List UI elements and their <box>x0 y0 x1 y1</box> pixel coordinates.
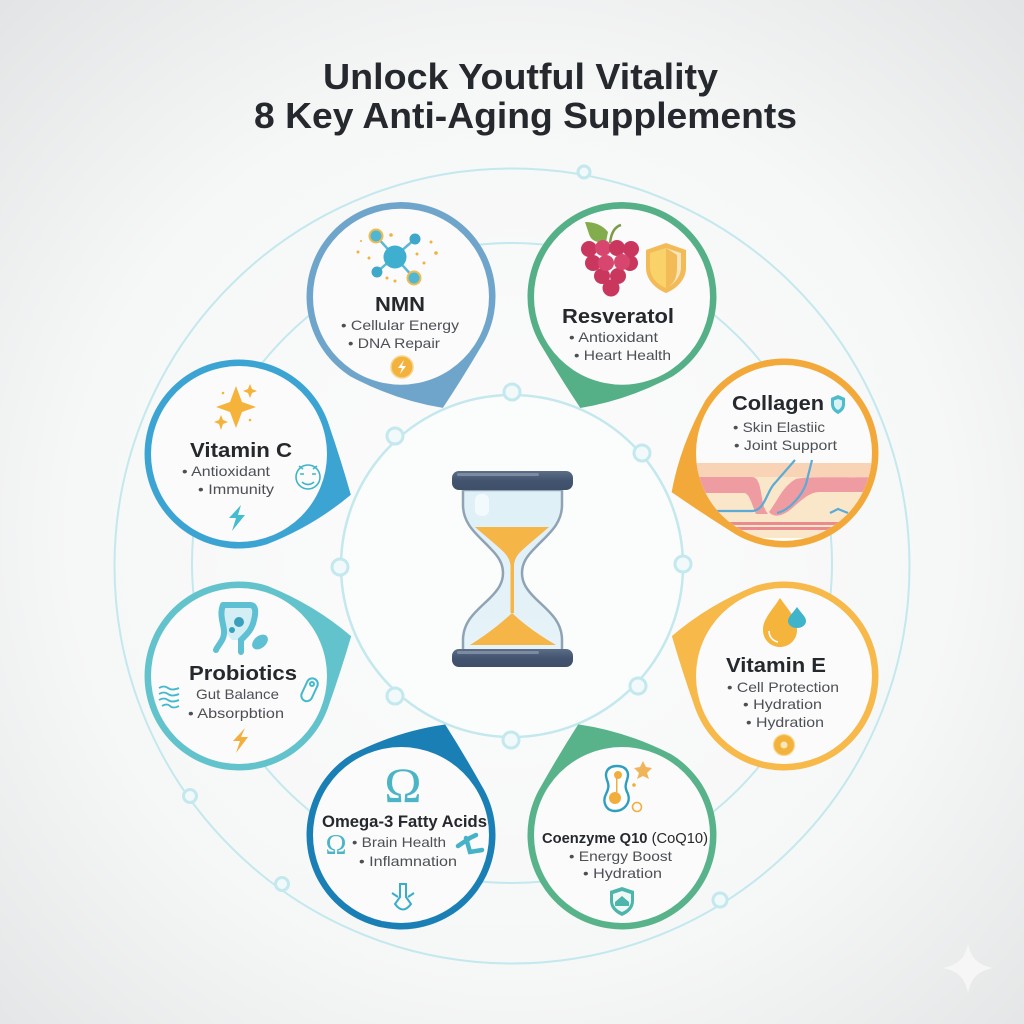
icon: sparkles <box>214 384 257 430</box>
heading: Coenzyme Q10 (CoQ10) <box>542 831 708 847</box>
benefits: • Skin Elastiic <box>733 419 825 435</box>
icon: omega large: Ω <box>384 757 422 813</box>
icon: oil drops <box>763 598 806 647</box>
panel: Collagen <box>672 358 878 548</box>
panel: Probiotics <box>118 547 383 797</box>
heading: Vitamin C <box>190 440 292 462</box>
benefits <box>569 329 671 363</box>
heading: Resveratol <box>562 306 674 328</box>
concentric orbit rings <box>114 166 910 964</box>
icon: shield <box>646 243 686 293</box>
benefits: • DNA Repair <box>348 335 440 351</box>
benefits: • Energy Boost <box>569 848 672 864</box>
icon: face <box>296 465 320 489</box>
ring <box>278 689 533 958</box>
benefits <box>182 463 274 497</box>
icon: waves <box>159 686 179 708</box>
icon: star <box>634 761 652 779</box>
benefits: • Immunity <box>198 481 274 497</box>
benefits: • Inflamnation <box>359 853 457 869</box>
icon: flask <box>392 884 414 910</box>
ring <box>118 547 383 797</box>
icon: hourglass <box>452 471 573 667</box>
icon: lightning <box>229 505 245 531</box>
icon: grapes <box>581 222 639 296</box>
benefits <box>341 317 459 351</box>
benefits: • Brain Health <box>352 834 446 850</box>
benefits: • Cell Protection <box>727 679 839 695</box>
benefits: Gut Balance <box>196 686 279 702</box>
panel: Vitamin C <box>118 333 383 584</box>
ring <box>279 175 531 441</box>
heading: Probiotics <box>189 663 297 685</box>
benefits: • Hydration <box>746 714 824 730</box>
icon: capsule strand <box>458 835 482 852</box>
panel: Coenzyme Q10 <box>490 690 745 958</box>
benefits: • Antioxidant <box>569 329 658 345</box>
icon: shield <box>610 887 634 916</box>
icon: small shield <box>831 395 845 414</box>
ring <box>118 333 383 584</box>
icon: gut <box>216 604 271 652</box>
illustration: skin cross-section <box>690 460 880 538</box>
icon: bacterium <box>299 677 320 703</box>
icon: molecule <box>356 230 438 284</box>
panel: Omega-3 Fatty Acids <box>278 689 533 958</box>
icon: coin <box>774 734 794 756</box>
heading: Omega-3 Fatty Acids <box>322 812 487 831</box>
benefits: • Cellular Energy <box>341 317 459 333</box>
icon: energy coin <box>391 356 413 378</box>
ring <box>640 547 905 797</box>
ring <box>490 690 745 958</box>
ring <box>641 333 904 581</box>
panel: Vitamin E <box>640 547 905 797</box>
heading: Collagen <box>732 393 824 415</box>
title <box>254 56 797 136</box>
heading: Vitamin E <box>726 655 826 677</box>
title: Unlock Youtful Vitality <box>323 56 718 97</box>
icon: lightning <box>233 728 248 753</box>
benefits: • Absorpbtion <box>188 705 284 721</box>
benefits <box>727 679 839 730</box>
benefits: • Heart Health <box>574 347 671 363</box>
benefits: • Hydration <box>743 696 822 712</box>
title: 8 Key Anti-Aging Supplements <box>254 95 797 136</box>
benefits <box>569 848 672 881</box>
icon: sparkle watermark <box>943 944 993 993</box>
benefits <box>188 686 284 721</box>
benefits <box>352 834 457 869</box>
benefits: • Joint Support <box>734 437 837 453</box>
panel: Resveratrol <box>492 175 744 441</box>
icon: mitochondria figure <box>604 766 642 812</box>
ring <box>492 175 744 441</box>
heading: NMN <box>375 294 425 316</box>
benefits: • Hydration <box>583 865 662 881</box>
panel: NMN <box>279 175 531 441</box>
benefits <box>733 419 837 453</box>
icon: omega small: Ω <box>326 830 346 861</box>
benefits: • Antioxidant <box>182 463 270 479</box>
